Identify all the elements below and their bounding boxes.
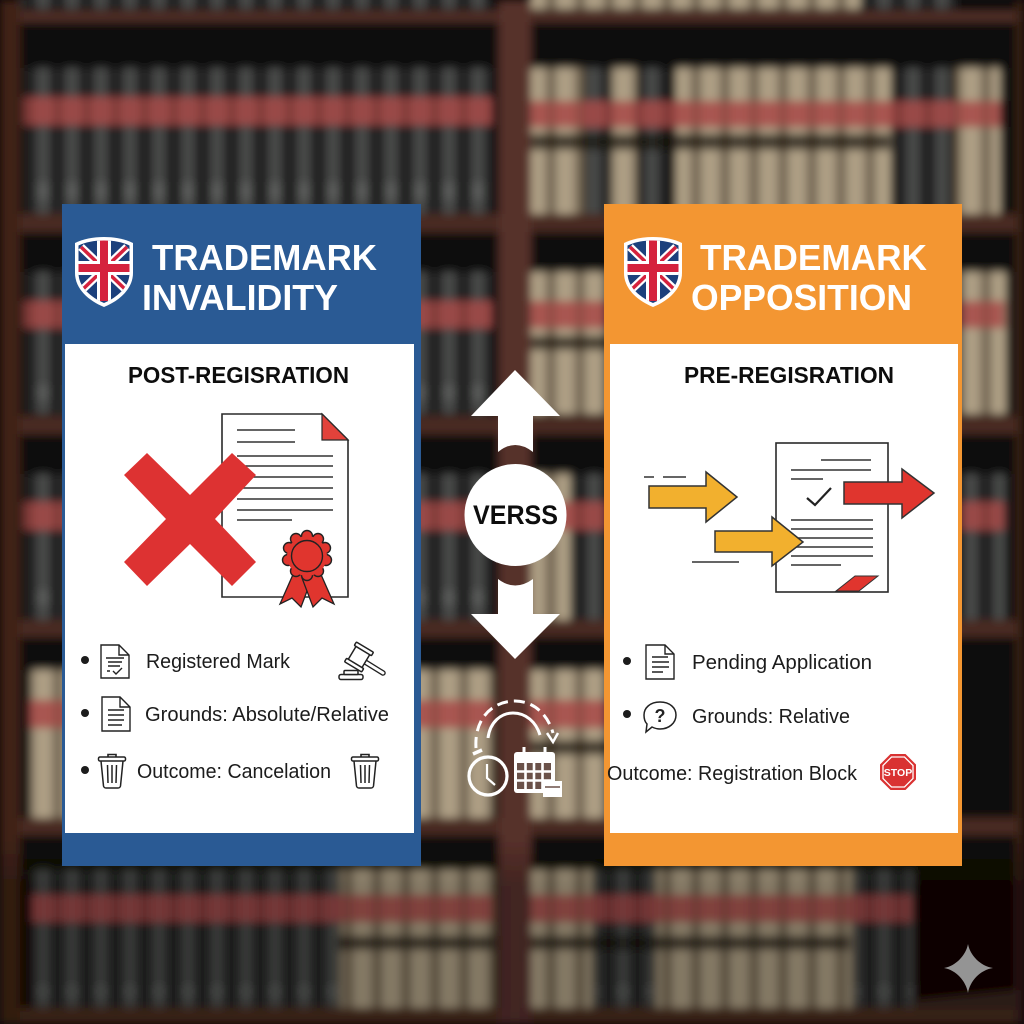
text: outcome: Outcome: Cancelation [137,761,331,783]
panel content: white card [610,344,958,833]
icon: question speech bubble [644,702,676,732]
subheading: pre-registration: PRE-REGISRATION [684,362,894,388]
list: invalidity points [81,642,389,788]
heading: trademark opposition: TRADEMARK [700,237,927,278]
heading: trademark invalidity [142,237,377,318]
icon: document [646,645,674,679]
heading: trademark opposition [691,237,927,318]
subheading: post-registration: POST-REGISRATION [128,362,349,388]
icon: checked document [101,645,129,678]
arrow: up [471,370,560,452]
icon: stop sign: STOP [884,767,912,779]
heading: trademark invalidity: TRADEMARK [152,237,377,278]
icon: UK flag shield [75,237,133,307]
icon: UK flag shield [624,237,682,307]
watermark: four-point star [944,944,993,993]
versus circle [464,464,566,566]
text: grounds: Grounds: Relative [692,706,850,728]
text: outcome: Outcome: Registration Block [607,763,858,785]
panel: trademark opposition [604,204,962,866]
panel content: white card [65,344,414,833]
icon: stop sign [880,754,916,790]
heading: trademark opposition: OPPOSITION [691,277,912,318]
icon: large red X [124,453,256,586]
heading: trademark invalidity: INVALIDITY [142,277,338,318]
list: opposition points [607,645,916,790]
panel background: blue [62,204,421,866]
icon: trash bin [98,754,126,788]
icon: gavel [339,642,383,680]
panel: trademark invalidity [62,204,421,866]
center: versus comparison [464,370,566,797]
panel background: orange [604,204,962,866]
text: grounds: Grounds: Absolute/Relative [145,704,389,726]
versus circle: VERSS [473,500,558,530]
icon: document [102,697,130,731]
text: pending application: Pending Application [692,652,872,674]
illustration: certificate document with rosette [222,414,348,607]
illustration: document with arrows [644,443,934,592]
icon: trash bin right [352,754,378,788]
icon: timeline clock and calendar [469,701,562,797]
arrow: down [471,579,560,659]
icon: question speech bubble: ? [654,706,666,726]
text: registered mark: Registered Mark [146,651,291,673]
